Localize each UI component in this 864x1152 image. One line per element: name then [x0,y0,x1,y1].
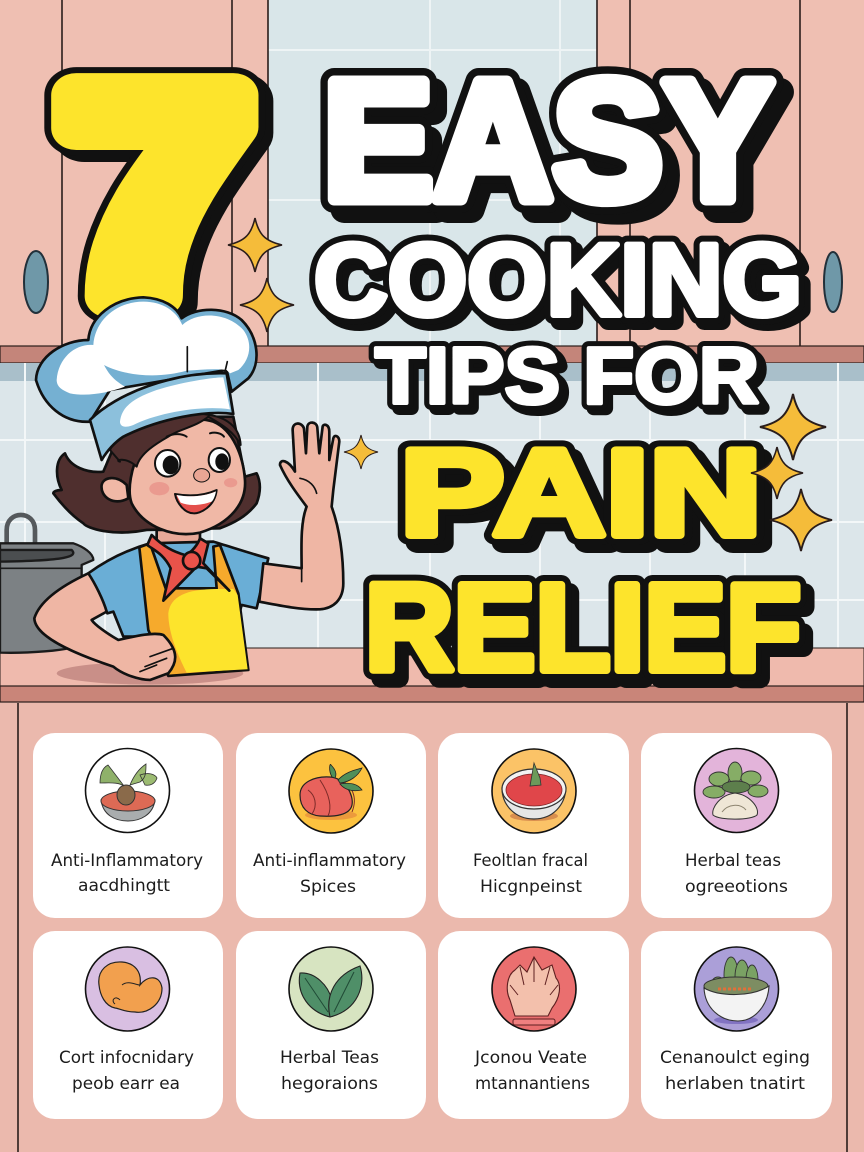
left arm [34,573,175,680]
hair back [53,417,260,532]
cooking pot [0,515,93,653]
title: EASY: EASY [333,56,783,246]
cheeks [149,482,169,495]
icon: tomato spice [289,749,373,833]
scarf [147,535,229,601]
icon: red sauce bowl [492,749,576,833]
card 2 label [253,851,406,897]
hat puff [36,297,257,422]
card 7 label: mtannantiens [475,1074,590,1094]
ear [102,478,128,501]
title: EASY: EASY [323,46,773,236]
card 7 label: Jconou Veate [474,1048,587,1068]
card 4 label: ogreeotions [685,877,788,897]
nose [194,469,210,482]
card 1 [33,733,223,918]
neck [157,530,200,550]
card 6 label: Herbal Teas [280,1048,379,1068]
icon: herb bowl [86,748,170,832]
big number 7: 7 [62,32,248,358]
hair fringe [110,413,241,467]
sparkle stars [228,218,832,551]
apron [139,543,248,676]
card 4 label [685,851,788,897]
card 2 label: Spices [300,877,356,897]
card 8 label [660,1048,810,1094]
card 1 label [51,851,203,896]
shirt [88,542,268,637]
chef character [34,297,343,685]
icon: green leaves [289,947,373,1031]
card 6 [236,931,426,1119]
title: PAIN: PAIN [400,425,762,562]
card 2 [236,733,426,918]
mouth [175,490,217,513]
icon: orange ginger [86,947,170,1031]
card 5 label: peob earr ea [72,1074,180,1094]
card 3 label: Feoltlan fracal [473,851,588,871]
card 1 label: Anti-Inflammatory [51,851,203,871]
hat band [90,373,233,460]
title: RELIEF: RELIEF [365,560,801,697]
icon: hands [492,947,576,1031]
card 4 label: Herbal teas [685,851,781,871]
card 8 label: Cenanoulct eging [660,1048,810,1068]
card 4 [641,733,832,918]
icon: salad bowl [694,947,778,1031]
title: TIPS FOR: TIPS FOR [375,331,759,420]
title: COOKING: COOKING [314,223,802,337]
big number 7: 7 [70,38,256,364]
big number 7: 7 [62,32,248,358]
title: RELIEF: RELIEF [373,568,809,705]
title: PAIN: PAIN [408,433,770,570]
card 6 label: hegoraions [281,1074,378,1094]
card 6 label [280,1048,379,1094]
title: TIPS FOR: TIPS FOR [375,331,759,420]
card 3 label [473,851,588,897]
card 5 [33,931,223,1119]
title: COOKING: COOKING [314,223,802,337]
card 8 label: herlaben tnatirt [665,1074,805,1094]
card 5 label [59,1048,194,1094]
card 1 label: aacdhingtt [78,876,170,896]
title: PAIN: PAIN [400,425,762,562]
cabinet handle right [824,252,842,312]
face [130,419,245,534]
card 5 label: Cort infocnidary [59,1048,194,1068]
title: TIPS FOR: TIPS FOR [380,336,764,425]
card 3 [438,733,629,918]
title: RELIEF: RELIEF [365,560,801,697]
card 7 label [474,1048,590,1094]
card 2 label: Anti-inflammatory [253,851,406,871]
right arm and raised hand [259,423,343,609]
icon: herbs and garlic [694,748,778,832]
counter shadow [57,662,243,685]
cabinet handle left [24,251,48,313]
eyes [155,450,180,477]
title: EASY: EASY [323,46,773,236]
card 7 [438,931,629,1119]
card 8 [641,931,832,1119]
card 3 label: Hicgnpeinst [480,877,582,897]
title: COOKING: COOKING [320,229,808,343]
